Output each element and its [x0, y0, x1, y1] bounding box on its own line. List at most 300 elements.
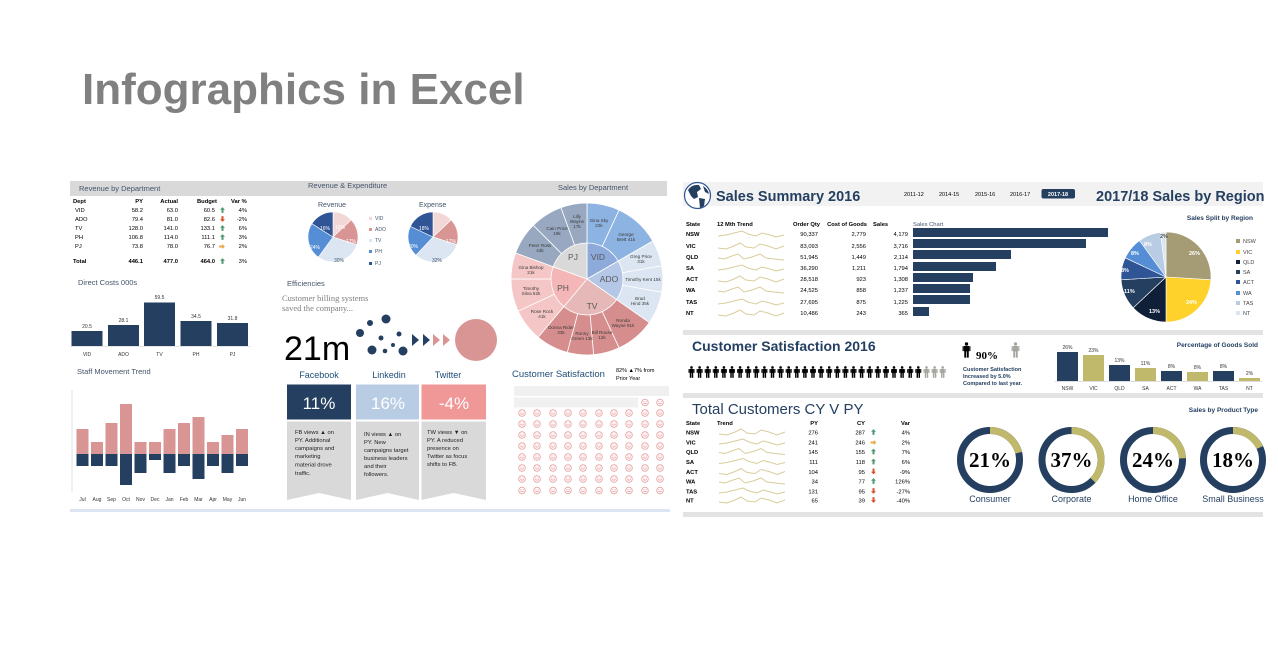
- chart: goods sold bars: 2%: [1246, 371, 1254, 377]
- heading: customer satisfaction: Customer Satisfaction: [512, 369, 605, 380]
- heading: sales summary 2016: Sales Summary 2016: [716, 189, 860, 205]
- chart: direct costs bars: 20.5: [82, 324, 92, 330]
- legend: region pie: NT: [1243, 311, 1251, 317]
- panel: facebook: traffic.: [295, 471, 311, 477]
- year tabs: 2015-16: [975, 192, 995, 198]
- chart: sunburst sales by department: TV: [587, 301, 598, 311]
- table: sales summary: 875: [856, 300, 866, 306]
- table: revenue by department: 63.0: [167, 208, 178, 214]
- table: total customers: 118: [856, 460, 865, 466]
- legend: revenue expense: VID: [375, 216, 384, 222]
- legend: revenue expense: [369, 216, 386, 267]
- chart: sunburst sales by department: VID: [591, 252, 605, 262]
- icon row: people: [688, 366, 946, 378]
- donut: home office: 24%: [1132, 448, 1174, 472]
- heading: direct costs: Direct Costs 000s: [78, 278, 137, 287]
- table: total customers: 126%: [895, 480, 910, 486]
- chart: goods sold bars: WA: [1194, 386, 1202, 392]
- chart: staff movement bars: Jul: [79, 497, 86, 503]
- year tabs: [904, 189, 1075, 198]
- chart: staff movement bars: Sep: [107, 497, 116, 503]
- chart: sunburst sales by department: 18k: [553, 231, 561, 236]
- panel: linkedin: [356, 370, 419, 500]
- chart: sunburst sales by department: Gina Sky: [590, 218, 609, 223]
- chart: direct costs bars: 34.5: [191, 314, 201, 320]
- chart: sunburst sales by department: Brett 41k: [617, 237, 636, 242]
- chart: sales bars: [913, 228, 1108, 316]
- table: revenue by department: PH: [75, 235, 83, 241]
- donut: small business: Small Business: [1202, 494, 1264, 504]
- chart: sunburst sales by department: Green 13k: [571, 336, 593, 341]
- chart: expense pie: 32%: [432, 258, 443, 264]
- chart: goods sold bars: ACT: [1166, 386, 1176, 392]
- table: sales summary: ACT: [686, 277, 698, 283]
- icon: dots arrows circle: [356, 314, 497, 361]
- panel: twitter: TW views ▼ on: [427, 430, 468, 436]
- chart: goods sold bars: 8%: [1220, 364, 1228, 370]
- chart: direct costs bars: PH: [193, 352, 200, 358]
- donut: small business: [1202, 430, 1264, 504]
- table: revenue by department: 477.0: [163, 259, 178, 265]
- chart: sunburst sales by department: Silva 52k: [522, 291, 541, 296]
- heading: revenue by department: Revenue by Department: [79, 184, 161, 193]
- year tabs: 2017-18: [1048, 192, 1068, 198]
- chart: sunburst sales by department: Cain Price: [546, 226, 568, 231]
- callout: 90% satisfaction: [963, 342, 1022, 387]
- chart: sunburst sales by department: Wayne: [570, 219, 585, 224]
- chart: sunburst sales by department: Greg Price: [630, 254, 652, 259]
- heading: 2017/18 sales by region: 2017/18 Sales by Region: [1096, 189, 1264, 205]
- donut: home office: Home Office: [1128, 494, 1178, 504]
- table: revenue by department: 79.4: [132, 217, 144, 223]
- chart: sunburst sales by department: Lilly: [573, 214, 582, 219]
- chart: staff movement bars: Jun: [238, 497, 246, 503]
- chart: expense pie: Expense: [419, 202, 446, 209]
- chart: goods sold bars: 11%: [1141, 361, 1151, 367]
- table: sales summary: 4,179: [893, 232, 908, 238]
- panel: facebook: material drove: [295, 462, 332, 468]
- heading: sales by department: Sales by Department: [558, 183, 629, 192]
- chart: sunburst sales by department: PJ: [568, 252, 578, 262]
- heading: percentage of goods sold: Percentage of Goods Sold: [1177, 342, 1258, 349]
- table: revenue by department: 111.1: [201, 235, 215, 241]
- chart: sunburst sales by department: 33k: [557, 330, 565, 335]
- panel: linkedin: 16%: [371, 394, 405, 413]
- table: revenue by department: 3%: [239, 235, 247, 241]
- chart: goods sold bars: NT: [1246, 386, 1253, 392]
- panel: linkedin: Linkedin: [372, 370, 406, 380]
- chart: direct costs bars: PJ: [230, 352, 236, 358]
- chart: goods sold bars: 8%: [1194, 365, 1202, 371]
- table: revenue by department: 106.8: [128, 235, 143, 241]
- year tabs: 2014-15: [939, 192, 959, 198]
- chart: sunburst sales by department: Ronda: [616, 318, 630, 323]
- chart: sunburst sales by department: Brad: [635, 296, 645, 301]
- table: sales summary: 2,779: [851, 232, 866, 238]
- chart: sunburst sales by department: Peter Ross: [529, 243, 552, 248]
- table: sales summary: 10,486: [800, 311, 818, 317]
- heading: sales split by region: Sales Split by Region: [1187, 215, 1253, 222]
- table: total customers: 287: [855, 430, 865, 436]
- chart: staff movement bars: May: [223, 497, 233, 503]
- chart: direct costs bars: 31.8: [228, 316, 238, 322]
- panel: twitter: PY. A reduced: [427, 438, 463, 444]
- chart: direct costs bars: VID: [83, 352, 92, 358]
- table: total customers: 77: [859, 480, 865, 486]
- table: revenue by department: Var %: [231, 199, 247, 205]
- table: revenue by department: PY: [135, 199, 143, 205]
- table: total customers: 246: [855, 440, 865, 446]
- callout: 90% satisfaction: 90%: [976, 350, 998, 362]
- chart: revenue pie: 16%: [320, 226, 331, 232]
- table: total customers: 155: [855, 450, 865, 456]
- table: total customers: CY: [857, 421, 865, 427]
- legend: region pie: TAS: [1243, 301, 1254, 307]
- heading: sales by product type: Sales by Product Type: [1189, 407, 1258, 414]
- panel: facebook: Facebook: [299, 370, 339, 380]
- table: total customers: -40%: [896, 498, 910, 504]
- chart: sunburst sales by department: Wayne 81k: [612, 323, 635, 328]
- chart: sunburst sales by department: 17k: [573, 224, 581, 229]
- table: sales summary: VIC: [686, 244, 696, 250]
- legend: region pie: ACT: [1243, 280, 1255, 286]
- table: sales summary: Cost of Goods: [827, 222, 867, 228]
- table: revenue by department: 6%: [239, 226, 247, 232]
- table: total customers: Trend: [717, 421, 733, 427]
- table: sales summary: 2,556: [851, 244, 866, 250]
- table: revenue by department: 3%: [239, 259, 247, 265]
- panel: facebook: campaigns and: [295, 446, 334, 452]
- table: total customers: VIC: [686, 440, 696, 446]
- chart: goods sold bars: 26%: [1062, 345, 1073, 351]
- table: total customers: 39: [859, 498, 865, 504]
- table: total customers: ACT: [686, 470, 698, 476]
- table: sales summary: QLD: [686, 255, 698, 261]
- table: sales summary: 90,337: [800, 232, 818, 238]
- table: sales summary: 12 Mth Trend: [717, 222, 753, 228]
- table: total customers: 95: [859, 490, 865, 496]
- table: revenue by department: 446.1: [128, 259, 144, 265]
- chart: sunburst sales by department: PH: [557, 283, 569, 293]
- donut: corporate: 37%: [1050, 448, 1092, 472]
- legend: region pie: WA: [1243, 291, 1252, 297]
- table: total customers: -9%: [900, 470, 910, 476]
- text: billing systems: Customer billing systems: [282, 293, 368, 303]
- table: total customers: 4%: [902, 430, 910, 436]
- chart: sunburst sales by department: 31k: [637, 259, 645, 264]
- donut: consumer: [960, 430, 1020, 504]
- table: sales summary: 923: [856, 277, 866, 283]
- chart: sunburst sales by department: [511, 203, 663, 355]
- panel: twitter: Twitter as focus: [427, 454, 467, 460]
- panel: linkedin: campaigns target: [364, 448, 409, 454]
- table: sales summary: [686, 222, 944, 317]
- table: revenue by department: Actual: [160, 199, 178, 205]
- chart: staff movement bars: [72, 390, 248, 503]
- chart: region pie: 11%: [1124, 289, 1135, 295]
- chart: staff movement bars: Nov: [136, 497, 145, 503]
- chart: expense pie: [408, 202, 458, 264]
- chart: sunburst sales by department: 41k: [538, 314, 546, 319]
- table: sales summary: 24,525: [800, 288, 818, 294]
- heading: revenue & expenditure: Revenue & Expenditure: [308, 181, 387, 190]
- donut: corporate: [1042, 430, 1101, 504]
- table: sales summary: 858: [856, 288, 866, 294]
- table: revenue by department: TV: [75, 226, 83, 232]
- text: 82% from prior year: [616, 368, 655, 382]
- chart: goods sold bars: VIC: [1089, 386, 1098, 392]
- chart: staff movement bars: Oct: [122, 497, 130, 503]
- legend: region pie: NSW: [1243, 239, 1257, 245]
- chart: sunburst sales by department: George: [618, 232, 634, 237]
- chart: revenue pie: [308, 202, 358, 264]
- chart: direct costs bars: 59.5: [155, 295, 165, 301]
- heading: customer satisfaction 2016: Customer Satisfaction 2016: [692, 338, 876, 354]
- chart: region pie: 24%: [1186, 300, 1197, 306]
- table: revenue by department: -2%: [237, 217, 247, 223]
- text: billing systems: saved the company...: [282, 303, 353, 313]
- donut: corporate: Corporate: [1051, 494, 1092, 504]
- callout: 90% satisfaction: Customer Satisfaction: [963, 367, 1022, 373]
- chart: staff movement bars: Dec: [151, 497, 160, 503]
- chart: region pie: 2%: [1160, 234, 1168, 240]
- table: sales summary: 3,716: [893, 244, 908, 250]
- table: revenue by department: 464.0: [200, 259, 215, 265]
- table: revenue by department: 76.7: [204, 244, 215, 250]
- table: revenue by department: 2%: [239, 244, 247, 250]
- table: sales summary: WA: [686, 288, 696, 294]
- chart: staff movement bars: Jan: [165, 497, 174, 503]
- table: total customers: PY: [810, 421, 818, 427]
- table: total customers: State: [686, 421, 701, 427]
- table: sales summary: 1,211: [852, 266, 866, 272]
- table: total customers: WA: [686, 480, 696, 486]
- chart: sunburst sales by department: Hind 35k: [631, 301, 650, 306]
- chart: goods sold bars: SA: [1142, 386, 1149, 392]
- chart: revenue pie: 17%: [346, 239, 357, 245]
- table: sales summary: Order Qty: [793, 222, 821, 228]
- heading: total customers cy v py: Total Customers CY V PY: [692, 401, 863, 418]
- chart: staff movement bars: Mar: [194, 497, 203, 503]
- table: total customers: -27%: [896, 490, 910, 496]
- legend: revenue expense: TV: [375, 238, 382, 244]
- table: sales summary: 36,290: [800, 266, 818, 272]
- panel: linkedin: business leaders: [364, 456, 408, 462]
- table: sales summary: Sales Chart: [913, 222, 944, 228]
- text: billing systems: [282, 293, 368, 313]
- table: sales summary: 1,237: [893, 288, 908, 294]
- year tabs: 2011-12: [904, 192, 924, 198]
- table: sales summary: 1,308: [893, 277, 908, 283]
- chart: expense pie: 20%: [408, 244, 419, 250]
- chart: sunburst sales by department: Timothy: [523, 286, 540, 291]
- text: 82% from prior year: Prior Year: [616, 376, 640, 382]
- title: Infographics in Excel: [82, 65, 525, 114]
- panel: twitter: -4%: [439, 394, 469, 413]
- table: total customers: 111: [809, 460, 818, 466]
- chart: sunburst sales by department: Donna Rider: [548, 325, 574, 330]
- chart: staff movement bars: Feb: [180, 497, 189, 503]
- panel: twitter: Twitter: [435, 370, 461, 380]
- table: sales summary: 243: [856, 311, 866, 317]
- table: sales summary: 1,449: [851, 255, 866, 261]
- table: sales summary: 27,695: [800, 300, 818, 306]
- table: revenue by department: 141.0: [163, 226, 178, 232]
- table: revenue by department: ADO: [75, 217, 88, 223]
- chart: sunburst sales by department: Gina Bishop: [518, 265, 544, 270]
- table: revenue by department: PJ: [75, 244, 82, 250]
- chart: direct costs bars: [70, 295, 251, 358]
- chart: sunburst sales by department: 43k: [536, 248, 544, 253]
- table: revenue by department: 81.0: [167, 217, 178, 223]
- table: revenue by department: 78.0: [167, 244, 178, 250]
- table: sales summary: 51,945: [800, 255, 818, 261]
- table: total customers: 65: [812, 498, 818, 504]
- legend: region pie: QLD: [1243, 260, 1254, 266]
- panel: right dashboard: [683, 180, 1264, 517]
- chart: sunburst sales by department: Timothy Kent 15k: [625, 277, 661, 282]
- table: total customers: NSW: [686, 430, 700, 436]
- panel: twitter: [422, 370, 486, 500]
- chart: satisfaction smiley grid: [514, 386, 669, 494]
- chart: goods sold bars: 23%: [1088, 348, 1099, 354]
- table: sales summary: SA: [686, 266, 695, 272]
- table: revenue by department: 128.0: [128, 226, 143, 232]
- chart: sunburst sales by department: Rose Rock: [531, 309, 554, 314]
- table: total customers: 6%: [902, 460, 910, 466]
- chart: revenue pie: 13%: [335, 225, 346, 231]
- chart: expense pie: 17%: [446, 239, 457, 245]
- table: total customers: [686, 421, 911, 504]
- table: revenue by department: Total: [73, 259, 87, 265]
- year tabs: 2016-17: [1010, 192, 1030, 198]
- panel: facebook: PY. Additional: [295, 438, 330, 444]
- donut: home office: [1124, 430, 1182, 504]
- icon: globe: [684, 182, 710, 208]
- table: total customers: 7%: [902, 450, 910, 456]
- table: total customers: 2%: [902, 440, 910, 446]
- table: total customers: Var: [901, 421, 911, 427]
- table: sales summary: NSW: [686, 232, 700, 238]
- legend: region pie: VIC: [1243, 250, 1252, 256]
- panel: linkedin: PY. New: [364, 440, 387, 446]
- donut: small business: 18%: [1212, 448, 1254, 472]
- table: total customers: 131: [808, 490, 818, 496]
- table: total customers: SA: [686, 460, 695, 466]
- table: total customers: 145: [808, 450, 818, 456]
- panel: twitter: presence on: [427, 446, 459, 452]
- table: sales summary: NT: [686, 311, 694, 317]
- panel: linkedin: followers.: [364, 472, 389, 478]
- table: total customers: 241: [808, 440, 818, 446]
- table: sales summary: 83,093: [800, 244, 818, 250]
- panel: facebook: 11%: [303, 394, 335, 413]
- table: total customers: QLD: [686, 450, 698, 456]
- callout: 90% satisfaction: Compared to last year.: [963, 381, 1022, 387]
- panel: linkedin: IN views ▲ on: [364, 432, 401, 438]
- chart: goods sold bars: TAS: [1219, 386, 1229, 392]
- chart: region pie: 8%: [1121, 268, 1129, 274]
- panel: facebook: FB views ▲ on: [295, 430, 334, 436]
- table: revenue by department: 73.8: [132, 244, 143, 250]
- heading: efficiencies: Efficiencies: [287, 279, 325, 288]
- chart: revenue pie: 30%: [334, 258, 345, 264]
- table: revenue by department: VID: [75, 208, 85, 214]
- chart: direct costs bars: TV: [156, 352, 163, 358]
- chart: region pie: 13%: [1149, 309, 1160, 315]
- table: revenue by department: 114.0: [164, 235, 178, 241]
- table: revenue by department: 82.6: [204, 217, 215, 223]
- table: total customers: 276: [808, 430, 818, 436]
- heading: staff movement trend: Staff Movement Trend: [77, 367, 151, 376]
- table: total customers: 34: [812, 480, 819, 486]
- table: revenue by department: Budget: [197, 199, 217, 205]
- chart: goods sold bars: 8%: [1168, 364, 1176, 370]
- table: sales summary: TAS: [686, 300, 697, 306]
- table: total customers: NT: [686, 498, 694, 504]
- table: sales summary: 365: [898, 311, 908, 317]
- chart: revenue pie: Revenue: [318, 202, 346, 209]
- table: sales summary: 28,518: [800, 277, 818, 283]
- panel: left dashboard: [70, 178, 670, 512]
- table: sales summary: 2,114: [894, 255, 909, 261]
- chart: revenue pie: 24%: [310, 245, 321, 251]
- text: 82% from prior year: 82% ▲7% from: [616, 368, 655, 374]
- legend: region pie: SA: [1243, 270, 1251, 276]
- donut: consumer: Consumer: [969, 494, 1011, 504]
- chart: staff movement bars: Apr: [209, 497, 217, 503]
- big number 21m: 21m: [284, 330, 350, 368]
- chart: sunburst sales by department: Ronny: [575, 331, 589, 336]
- chart: sunburst sales by department: ADO: [600, 274, 619, 284]
- table: revenue by department: 58.2: [132, 208, 143, 214]
- chart: goods sold bars: [1055, 345, 1262, 392]
- chart: sunburst sales by department: 21k: [527, 270, 535, 275]
- panel: facebook: [287, 370, 351, 500]
- chart: staff movement bars: Aug: [93, 497, 102, 503]
- panel: twitter: shifts to FB.: [427, 462, 458, 468]
- chart: direct costs bars: 28.1: [119, 318, 129, 324]
- legend: revenue expense: PH: [375, 249, 382, 255]
- legend: revenue expense: ADO: [375, 227, 386, 233]
- chart: sunburst sales by department: 12k: [598, 335, 606, 340]
- donut: consumer: 21%: [969, 448, 1011, 472]
- legend: region pie: [1236, 239, 1257, 317]
- chart: region pie: 26%: [1189, 251, 1200, 257]
- table: sales summary: Sales: [873, 222, 888, 228]
- chart: direct costs bars: ADO: [118, 352, 129, 358]
- table: total customers: TAS: [686, 490, 697, 496]
- chart: sunburst sales by department: 22k: [595, 223, 603, 228]
- chart: expense pie: 18%: [419, 226, 430, 232]
- table: revenue by department: 133.1: [200, 226, 215, 232]
- table: revenue by department: 60.5: [204, 208, 215, 214]
- panel: facebook: marketing: [295, 454, 320, 460]
- table: sales summary: 1,794: [893, 266, 909, 272]
- chart: sunburst sales by department: Bill Rouse: [592, 330, 613, 335]
- panel: linkedin: and their: [364, 464, 387, 470]
- chart: region pie: 8%: [1131, 251, 1139, 257]
- chart: goods sold bars: 13%: [1114, 358, 1125, 364]
- table: total customers: 104: [808, 470, 819, 476]
- table: revenue by department: [73, 199, 247, 265]
- table: revenue by department: Dept: [73, 199, 86, 205]
- chart: region pie: [1121, 232, 1211, 322]
- table: revenue by department: 4%: [239, 208, 247, 214]
- chart: region pie: 8%: [1144, 242, 1152, 248]
- table: total customers: 95: [859, 470, 865, 476]
- table: sales summary: State: [686, 222, 701, 228]
